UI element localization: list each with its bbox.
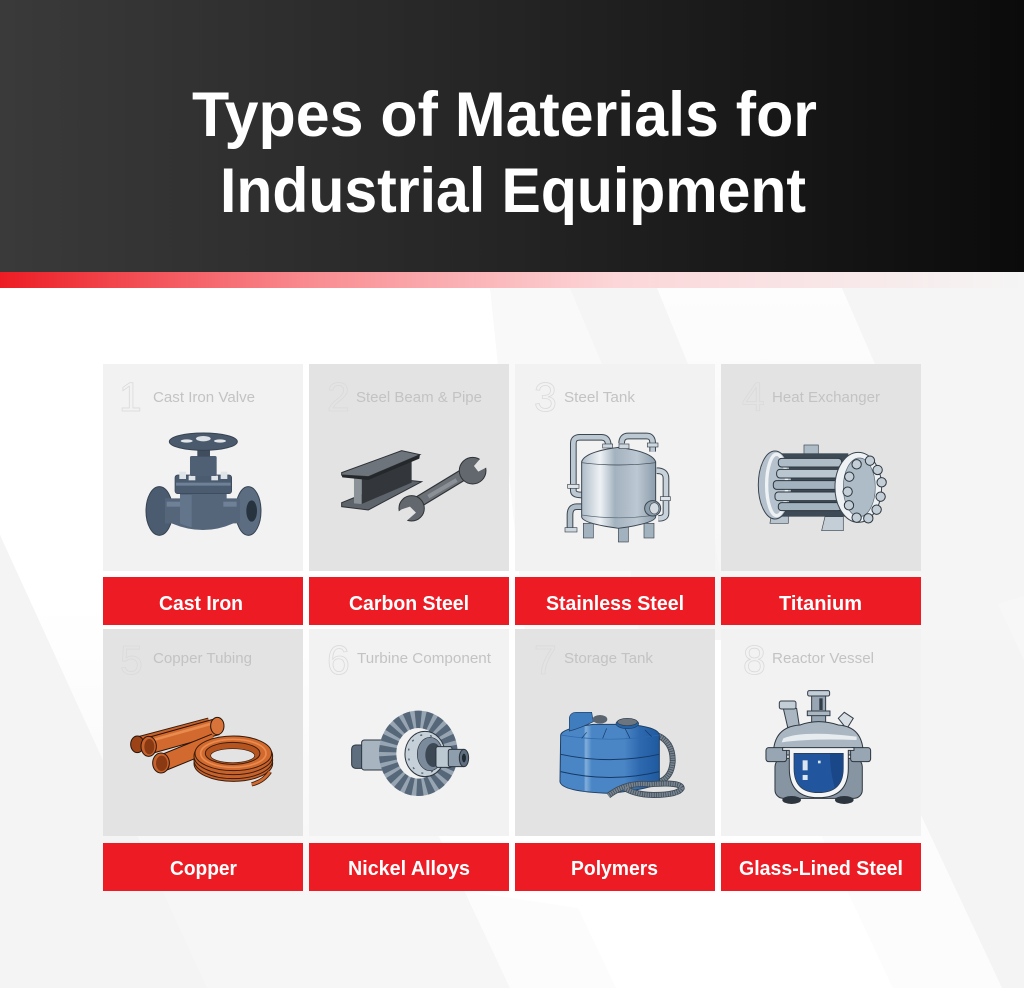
icon: turbine: [352, 719, 469, 787]
panel: carbon steel: [309, 364, 509, 571]
panel: copper: [103, 629, 303, 836]
label: copper: Copper: [170, 858, 237, 880]
panel: glass-lined steel: [721, 629, 921, 836]
panel: nickel alloys: [309, 629, 509, 836]
icon: copper tubing: [131, 717, 273, 784]
icon: steel tank: [565, 436, 670, 542]
panel: stainless steel: [515, 364, 715, 571]
number 4: 4: [742, 374, 765, 420]
number 5: 5: [120, 637, 143, 683]
panel: cast iron: [103, 364, 303, 571]
caption: turbine component: Turbine Component: [357, 650, 492, 667]
number 2: 2: [327, 374, 350, 420]
label: titanium: Titanium: [779, 593, 862, 615]
page background with diagonal light bands: [0, 288, 1024, 988]
number 3: 3: [534, 374, 557, 420]
icon: valve: [146, 433, 261, 535]
label: glass-lined steel: Glass-Lined Steel: [739, 858, 903, 880]
caption: reactor vessel: Reactor Vessel: [772, 650, 874, 667]
label: carbon steel: Carbon Steel: [349, 593, 469, 615]
label: copper: [103, 843, 303, 891]
label: polymers: Polymers: [571, 858, 658, 880]
number 1: 1: [119, 374, 142, 420]
panel: titanium: [721, 364, 921, 571]
panel: polymers: [515, 629, 715, 836]
label: stainless steel: Stainless Steel: [546, 593, 684, 615]
number 6: 6: [327, 637, 350, 683]
caption: heat exchanger: Heat Exchanger: [772, 389, 880, 406]
icon: steel beam and wrench: [342, 450, 495, 525]
label: carbon steel: [309, 577, 509, 625]
number 8: 8: [743, 637, 766, 683]
title: [192, 80, 817, 226]
red gradient strip: [0, 272, 1024, 288]
caption: steel tank: Steel Tank: [564, 389, 635, 406]
label: nickel alloys: [309, 843, 509, 891]
icon: storage tank: [560, 712, 682, 796]
label: polymers: [515, 843, 715, 891]
number 7: 7: [534, 637, 557, 683]
title: Types of Materials for: [192, 80, 817, 150]
label: titanium: [721, 577, 921, 625]
caption: storage tank: Storage Tank: [564, 650, 653, 667]
caption: steel beam and pipe: Steel Beam & Pipe: [356, 389, 482, 406]
caption: cast iron valve: Cast Iron Valve: [153, 389, 255, 406]
label: cast iron: Cast Iron: [159, 593, 243, 615]
title: Industrial Equipment: [220, 156, 806, 226]
label: glass-lined steel: [721, 843, 921, 891]
icon: reactor vessel: [766, 691, 871, 804]
label: nickel alloys: Nickel Alloys: [348, 858, 470, 880]
icon: heat exchanger: [758, 445, 886, 531]
header band: [0, 0, 1024, 272]
label: stainless steel: [515, 577, 715, 625]
label: cast iron: [103, 577, 303, 625]
caption: copper tubing: Copper Tubing: [153, 650, 252, 667]
